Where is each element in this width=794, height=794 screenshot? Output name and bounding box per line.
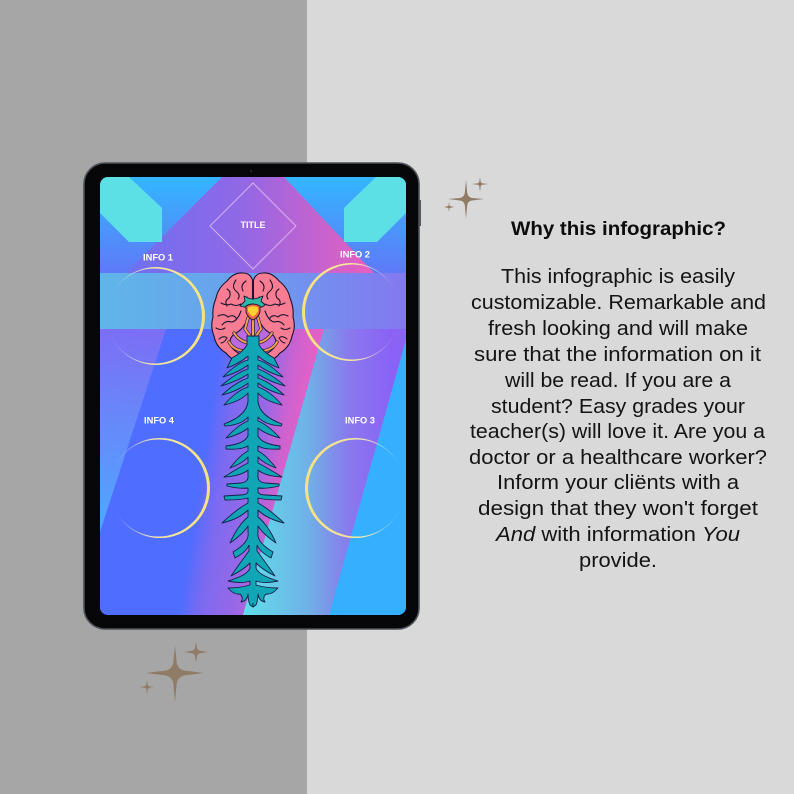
info 1 label: INFO 1 <box>143 252 173 262</box>
left cyan octagon <box>100 177 162 242</box>
info 3 circle <box>305 438 405 538</box>
spinal cord <box>221 336 285 607</box>
description text block <box>469 266 767 572</box>
right light diagonal stripe <box>243 329 409 615</box>
spine and brain illustration <box>212 273 294 607</box>
line 5: will be read. If you are a <box>504 370 732 392</box>
large sparkle <box>448 180 484 219</box>
info 1 circle <box>107 267 205 365</box>
right brain folds <box>259 280 290 343</box>
tablet side button <box>419 200 421 226</box>
sparkles: top right of tablet <box>444 177 488 219</box>
info 2 label: INFO 2 <box>340 250 370 260</box>
spine trunk <box>249 337 257 603</box>
info 2 circle <box>302 263 400 361</box>
line 3: fresh looking and will make <box>488 318 748 340</box>
central orange stem <box>252 316 254 336</box>
horizontal band <box>100 273 406 329</box>
orange nerve arcs dark outline <box>229 318 277 351</box>
brain <box>212 273 294 360</box>
tiny sparkle lower <box>444 202 454 212</box>
upper background <box>100 177 406 273</box>
line 2: customizable. Remarkable and <box>471 292 766 314</box>
pink to blue diagonal stripe <box>100 329 324 615</box>
line 10: design that they won't forget <box>478 498 758 520</box>
top trapezoid <box>126 177 374 273</box>
line 12: provide. <box>579 550 657 572</box>
line 8: doctor or a healthcare worker? <box>469 447 767 469</box>
right cyan octagon <box>344 177 406 242</box>
screen with infographic <box>100 177 409 615</box>
yellow shield <box>248 306 258 316</box>
right blue area <box>243 329 406 615</box>
tiny sparkle lower <box>140 680 154 695</box>
right lobe <box>254 273 294 360</box>
large sparkle <box>146 645 204 702</box>
orange nerve arcs <box>229 318 277 351</box>
info 4 label: INFO 4 <box>144 416 175 426</box>
title: TITLE <box>240 220 266 230</box>
spine left ribs <box>221 336 253 607</box>
tablet device <box>84 163 421 629</box>
tablet camera <box>250 170 252 172</box>
left light diagonal <box>100 329 166 532</box>
line 4: sure that the information on it <box>474 344 761 366</box>
left lobe <box>212 273 252 360</box>
tablet body <box>84 163 419 629</box>
info 4 circle <box>110 438 210 538</box>
line 1: This infographic is easily <box>501 266 735 288</box>
background: right light panel <box>307 0 794 794</box>
heading: why this infographic: Why this infographic? <box>511 218 726 240</box>
brain cavity <box>230 318 276 360</box>
sparkles: below tablet <box>140 642 208 702</box>
title diamond <box>210 183 296 269</box>
line 9: Inform your cliënts with a <box>497 472 740 494</box>
small sparkle upper <box>184 642 208 663</box>
small sparkle upper <box>472 177 488 192</box>
background: left grey panel <box>0 0 307 794</box>
line 11: And with information You <box>495 524 740 546</box>
line 6: student? Easy grades your <box>491 396 745 418</box>
lower background <box>100 329 406 615</box>
orange shield outer <box>246 304 260 320</box>
info 3 label: INFO 3 <box>345 416 375 426</box>
left brain folds <box>216 280 247 343</box>
spine right ribs <box>253 336 285 607</box>
line 7: teacher(s) will love it. Are you a <box>470 421 766 443</box>
teal brainstem top <box>240 296 265 307</box>
